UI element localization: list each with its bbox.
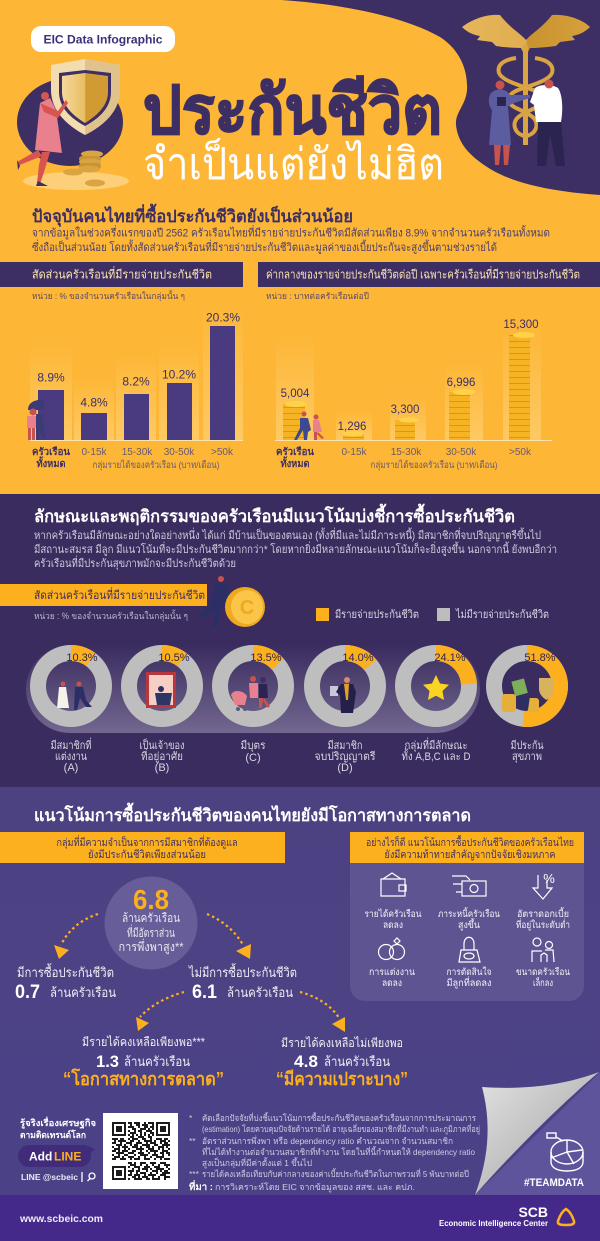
chart: coin stacks: 6,996 [447, 377, 475, 389]
text: has life insurance 0.7: มีการซื้อประกันชีวิต [17, 963, 114, 980]
footer [0, 1195, 600, 1241]
text: label all traits [402, 737, 471, 763]
icon: wedding couple [57, 682, 92, 710]
text: fewer children: มีลูกที่ลดลง [446, 976, 492, 989]
icon: team data database [547, 1133, 583, 1171]
illustration: dancing couple [294, 412, 324, 440]
text: label D: (D) [337, 762, 353, 774]
icon: wedding rings [378, 938, 404, 960]
icon: falling interest: % [543, 871, 555, 886]
legend: มีรายจ่ายประกันชีวิต [335, 608, 419, 621]
icon: smaller family [532, 938, 554, 962]
icon: star [423, 675, 449, 700]
ribbon: group in need: กลุ่มที่มีความจำเป็นจากการมีสมาชิกที่ต้องดูแล [56, 835, 238, 849]
icon: person in window [146, 672, 176, 708]
donut chart: all traits 24.1%: 24.1% [434, 652, 466, 664]
text: has life insurance 0.7: ล้านครัวเรือน [50, 985, 116, 1000]
donut chart: health insurance 51.8%: 51.8% [524, 652, 556, 664]
icon: money, coins and shield [502, 678, 554, 712]
text: label B: เป็นเจ้าของ [140, 738, 184, 752]
text: sufficient income 1.3: มีรายได้คงเหลือเพียงพอ*** [82, 1035, 205, 1049]
panel: median premium chart [258, 262, 600, 471]
illustration: man pushing coin [197, 576, 265, 627]
panel: share of households chart [0, 262, 243, 471]
bar chart: share by income: ครัวเรือน [32, 446, 70, 458]
text: label D [314, 739, 376, 774]
text: label all traits: ทั้ง A,B,C และ D [402, 748, 471, 763]
callout: 6.8 million households: ที่มีอัตราส่วน [127, 924, 175, 940]
bar chart: share by income [27, 300, 243, 471]
footer: www.scbeic.com [19, 1213, 103, 1225]
text: fewer children [446, 966, 492, 989]
bar chart: share by income: >50k [211, 447, 234, 458]
text: label A: แต่งงาน [55, 751, 87, 763]
illustration: man pushing coin: C [240, 597, 254, 619]
chart: coin stacks: >50k [509, 447, 532, 458]
background: yellow header section [0, 0, 600, 494]
text: label B [140, 738, 184, 774]
text: household smaller [516, 967, 570, 989]
text block: footnotes [189, 1112, 480, 1193]
text: label B: ที่อยู่อาศัย [141, 748, 183, 763]
text: low interest [516, 907, 570, 931]
icon: SCB logo [558, 1209, 574, 1225]
donut chart: has children 13.5%: 13.5% [250, 652, 282, 664]
text: team data: #TEAMDATA [524, 1177, 584, 1189]
callout: vulnerable: “มีความเปราะบาง” [276, 1069, 408, 1089]
panel: follow line: ตามติดเทรนด์โลก [20, 1129, 86, 1140]
badge: EIC Data Infographic [31, 26, 175, 52]
arrow: to sufficient income [136, 992, 184, 1031]
button: add line: LINE [54, 1150, 81, 1164]
text: label A: มีสมาชิกที่ [50, 737, 92, 752]
donut chart: married 10.3%: 10.3% [66, 652, 98, 664]
icon: debt banknote [452, 876, 486, 896]
text: household smaller: ขนาดครัวเรือน [516, 967, 570, 978]
text: household smaller: เล็กลง [533, 976, 553, 989]
chart: coin stacks: 3,300 [391, 404, 419, 416]
text: sufficient income 1.3: 1.3 [96, 1052, 119, 1071]
text: no life insurance 6.1: 6.1 [192, 982, 217, 1003]
chart: coin stacks: 0-15k [341, 447, 368, 458]
panel: macro challenges: ยังมีความท้าทายสำคัญจากปัจจัยเชิงมหภาค [384, 848, 556, 861]
donut chart: graduate 14.0%: 14.0% [342, 652, 374, 664]
text: no life insurance 6.1: ล้านครัวเรือน [227, 985, 293, 1000]
icon: pregnancy [459, 937, 480, 962]
text block: footnotes: การวิเคราะห์โดย EIC จากข้อมูลของ สสช. และ คปภ. [215, 1182, 415, 1193]
bar chart: share by income: 4.8% [80, 396, 108, 410]
callout: market opportunity: “โอกาสทางการตลาด” [63, 1068, 224, 1089]
ribbon: share of households: สัดส่วนครัวเรือนที่มีรายจ่ายประกันชีวิต [34, 587, 205, 602]
text block: section 1 intro [32, 224, 550, 254]
text: label A: (A) [64, 762, 78, 774]
text block: section 1 intro: จากข้อมูลในช่วงครึ่งแรกของปี 2562 ครัวเรือนไทยที่มีรายจ่ายประกันชีวิตมีสัดส่วนเพียง 8.9% จากจำนวนครัวเรือนทั้งหมด [32, 224, 550, 240]
text: fewer children: การตัดสินใจ [446, 966, 492, 978]
text block: footnotes: รายได้คงเหลือเทียบกับค่ากลางของค่าเบี้ยประกันชีวิตในภาพรวมที่ 5 พันบาทต่อปี [202, 1168, 469, 1179]
legend [316, 608, 549, 621]
background: dark purple top-right blob [281, 0, 600, 195]
icon: search [82, 1172, 95, 1182]
icon: falling interest [533, 871, 555, 899]
panel: median premium chart: หน่วย : บาทต่อครัวเรือนต่อปี [266, 291, 369, 301]
text block: section 1 intro: ซึ่งถือเป็นส่วนน้อย โดยทั้งสัดส่วนครัวเรือนที่มีรายจ่ายประกันชีวิตและมูลค่าของเบี้ยประกันจะสูงขึ้นตามช่วงรายได้ [32, 239, 497, 254]
icon: graduate with diploma [330, 677, 356, 713]
chart: coin stacks: ทั้งหมด [280, 456, 310, 470]
heading: section 2: ลักษณะและพฤติกรรมของครัวเรือนมีแนวโน้มบ่งชี้การซื้อประกันชีวิต [34, 503, 515, 526]
bar chart: share by income: ทั้งหมด [36, 456, 66, 470]
text block: footnotes: ** [189, 1136, 196, 1146]
text: sufficient income 1.3 [82, 1035, 205, 1071]
illustration: woman holding shield with coins [17, 59, 129, 190]
text: has life insurance 0.7: 0.7 [15, 982, 40, 1003]
text: label health: มีประกัน [510, 739, 544, 752]
text: label D: มีสมาชิก [328, 739, 362, 752]
callout: 6.8 million households: 6.8 [133, 884, 169, 915]
callout: 6.8 million households: ล้านครัวเรือน [122, 911, 180, 925]
text: insufficient income 4.8: 4.8 [294, 1052, 318, 1071]
donut chart: all traits 24.1% [402, 652, 471, 763]
text: income falling [364, 908, 422, 931]
chart: coin stacks: 1,296 [338, 421, 366, 433]
text: label B: (B) [155, 762, 169, 774]
text: low interest: อัตราดอกเบี้ย [517, 907, 569, 920]
text block: section 2 intro: หากครัวเรือนมีลักษณะอย่างใดอย่างหนึ่ง ได้แก่ มีบ้านเป็นของตนเอง (ทั้งที่มีและไม่มีภาระหนี้) มีสมาชิกที่จบปริญญาตรีขึ้นไป [34, 527, 541, 542]
text block: footnotes: *** [189, 1169, 200, 1179]
donut chart: married 10.3% [38, 652, 104, 774]
panel: share of households chart: หน่วย : % ของจำนวนครัวเรือนในกลุ่มนั้น ๆ [32, 290, 185, 302]
panel: follow line [18, 1116, 96, 1182]
text: fewer marriages [369, 967, 415, 989]
bar chart: share by income: 10.2% [162, 368, 196, 382]
icon: wallet [381, 873, 406, 896]
text: label C: (C) [245, 752, 261, 764]
chart: coin stacks: 30-50k [446, 447, 477, 458]
ribbon: share of households [0, 584, 207, 606]
arrow: to buyers [54, 914, 98, 959]
panel: share of households chart: สัดส่วนครัวเรือนที่มีรายจ่ายประกันชีวิต [32, 266, 212, 282]
text block: footnotes: * [189, 1113, 193, 1123]
text: label C [240, 739, 266, 764]
arrow: to non-buyers [207, 914, 251, 959]
bar chart: share by income: 0-15k [81, 447, 108, 458]
callout: 6.8 million households [104, 876, 198, 970]
text: insufficient income 4.8: ล้านครัวเรือน [324, 1054, 390, 1069]
arrow: to insufficient income [300, 992, 345, 1032]
button: add line: Add [29, 1150, 52, 1164]
title: ประกันชีวิต [143, 73, 442, 147]
text: no life insurance 6.1: ไม่มีการซื้อประกันชีวิต [188, 963, 297, 980]
text: label health: สุขภาพ [512, 751, 542, 763]
chart: coin stacks [275, 319, 552, 471]
bar chart: share by income: 20.3% [206, 310, 240, 324]
illustration: couple with umbrella [27, 400, 46, 440]
illustration: caduceus with two people [462, 15, 590, 166]
footer: SCB [518, 1204, 548, 1220]
callout: 6.8 million households: การพึ่งพาสูง** [118, 938, 184, 955]
panel: follow line: รู้จริงเรื่องเศรษฐกิจ [20, 1116, 96, 1129]
text block: section 2 intro [34, 527, 557, 570]
text block: footnotes: ที่ไม่ได้ทำงานต่อจำนวนสมาชิกที่ทำงาน โดยในที่นี้กำหนดให้ dependency ratio [202, 1146, 475, 1157]
text: debt rising [438, 907, 500, 931]
chart: coin stacks: ครัวเรือน [276, 446, 314, 458]
ribbon: group in need [0, 832, 285, 863]
panel: follow line: LINE @scbeic [21, 1172, 78, 1182]
text: income falling: รายได้ครัวเรือน [364, 908, 422, 920]
icon: family with stroller [231, 676, 270, 711]
text: no life insurance 6.1 [188, 963, 297, 1003]
heading: section 3: แนวโน้มการซื้อประกันชีวิตของคนไทยยังมีโอกาสทางการตลาด [34, 802, 471, 825]
text: insufficient income 4.8: มีรายได้คงเหลือไม่เพียงพอ [281, 1036, 403, 1050]
text: sufficient income 1.3: ล้านครัวเรือน [124, 1054, 190, 1069]
bar chart: share by income: กลุ่มรายได้ของครัวเรือน (บาท/เดือน) [92, 459, 220, 471]
donut chart: health insurance 51.8% [494, 652, 560, 763]
chart: coin stacks: กลุ่มรายได้ของครัวเรือน (บาท/เดือน) [370, 459, 498, 471]
legend: ไม่มีรายจ่ายประกันชีวิต [455, 608, 549, 621]
text: label C: มีบุตร [240, 739, 266, 752]
QR code [103, 1113, 178, 1189]
text block: footnotes: อัตราส่วนการพึ่งพา หรือ dependency ratio คำนวณจาก จำนวนสมาชิก [202, 1135, 453, 1146]
unit label: หน่วย : % ของจำนวนครัวเรือนในกลุ่มนั้น ๆ [34, 609, 188, 622]
donut chart: homeowner 10.5% [129, 652, 195, 774]
text block: section 2 intro: ครัวเรือนที่มีประกันสุขภาพมักจะมีประกันชีวิตด้วย [34, 555, 236, 570]
bar chart: share by income: 30-50k [164, 447, 195, 458]
chart: coin stacks: 5,004 [281, 388, 310, 400]
button: add line [18, 1145, 95, 1167]
panel: macro challenges [350, 832, 584, 1001]
chart: coin stacks: 15,300 [503, 319, 539, 331]
footer: Economic Intelligence Center [439, 1218, 549, 1228]
text: low interest: ที่อยู่ในระดับต่ำ [516, 918, 570, 931]
text: debt rising: สูงขึ้น [458, 918, 480, 931]
subtitle: จำเป็นแต่ยังไม่ฮิต [143, 138, 444, 189]
ribbon: group in need: ยังมีประกันชีวิตเพียงส่วนน้อย [88, 848, 206, 861]
text block: footnotes: (estimation) โดยควบคุมปัจจัยด้านรายได้ อายุเฉลี่ยของสมาชิกที่มีงานทำ และภูมิภาคที่อยู่ [202, 1123, 480, 1135]
bar chart: share by income: 8.2% [122, 374, 150, 388]
text: label D: จบปริญญาตรี [314, 750, 376, 763]
text: insufficient income 4.8 [281, 1036, 403, 1071]
text: debt rising: ภาระหนี้ครัวเรือน [438, 907, 500, 920]
bar chart: share by income: 15-30k [122, 447, 153, 458]
text: label A [50, 737, 92, 774]
donut chart: homeowner 10.5%: 10.5% [158, 652, 190, 664]
heading: section 1: ปัจจุบันคนไทยที่ซื้อประกันชีวิตยังเป็นส่วนน้อย [32, 203, 353, 227]
text: label health [510, 739, 544, 763]
text block: footnotes: ที่มา : [189, 1179, 213, 1193]
chart: coin stacks: 15-30k [391, 447, 422, 458]
background: dark purple section 2 [0, 494, 600, 787]
donut chart: graduate 14.0% [312, 652, 378, 774]
text: income falling: ลดลง [383, 920, 403, 931]
bar chart: share by income: 8.9% [37, 370, 65, 384]
donut chart: has children 13.5% [220, 652, 286, 764]
badge: EIC Data Infographic: EIC Data Infographic [44, 32, 163, 46]
text block: footnotes: สูงเป็นกลุ่มที่มีค่าตั้งแต่ 1 ขึ้นไป [202, 1157, 312, 1169]
text: has life insurance 0.7 [15, 963, 116, 1003]
text block: footnotes: คัดเลือกปัจจัยที่บ่งชี้แนวโน้มการซื้อประกันชีวิตของครัวเรือนจากการประมาณการ [202, 1112, 476, 1123]
text: fewer marriages: ลดลง [382, 978, 402, 989]
background pill behind donuts [26, 645, 480, 733]
text: label all traits: กลุ่มที่มีลักษณะ [404, 737, 468, 752]
text: fewer marriages: การแต่งงาน [369, 967, 415, 978]
page curl corner [475, 1072, 600, 1195]
background: purple section 3 [0, 787, 600, 1195]
